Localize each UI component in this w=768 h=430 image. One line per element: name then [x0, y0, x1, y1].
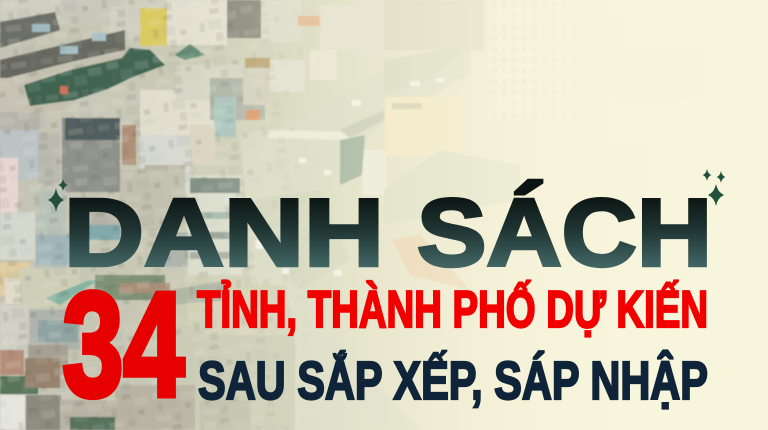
small-scale rooftop texture — [0, 0, 283, 430]
background: hazy aerial city photo — [0, 0, 520, 430]
heading: DANH SÁCH — [64, 180, 712, 286]
road lanes and cars — [256, 78, 445, 328]
upper-left blocks — [0, 0, 170, 20]
icon: sparkles right — [702, 169, 726, 206]
lower-left colourful buildings — [0, 212, 35, 260]
road corner and hazy right side — [240, 45, 470, 430]
trees — [24, 48, 165, 106]
heading: DANH SÁCH: SÁCH — [417, 180, 712, 286]
midrise rooftops — [75, 72, 215, 135]
icon: sparkles left — [48, 179, 68, 212]
heading: DANH SÁCH: DANH — [64, 180, 384, 286]
number: 34: 34 — [62, 261, 184, 427]
